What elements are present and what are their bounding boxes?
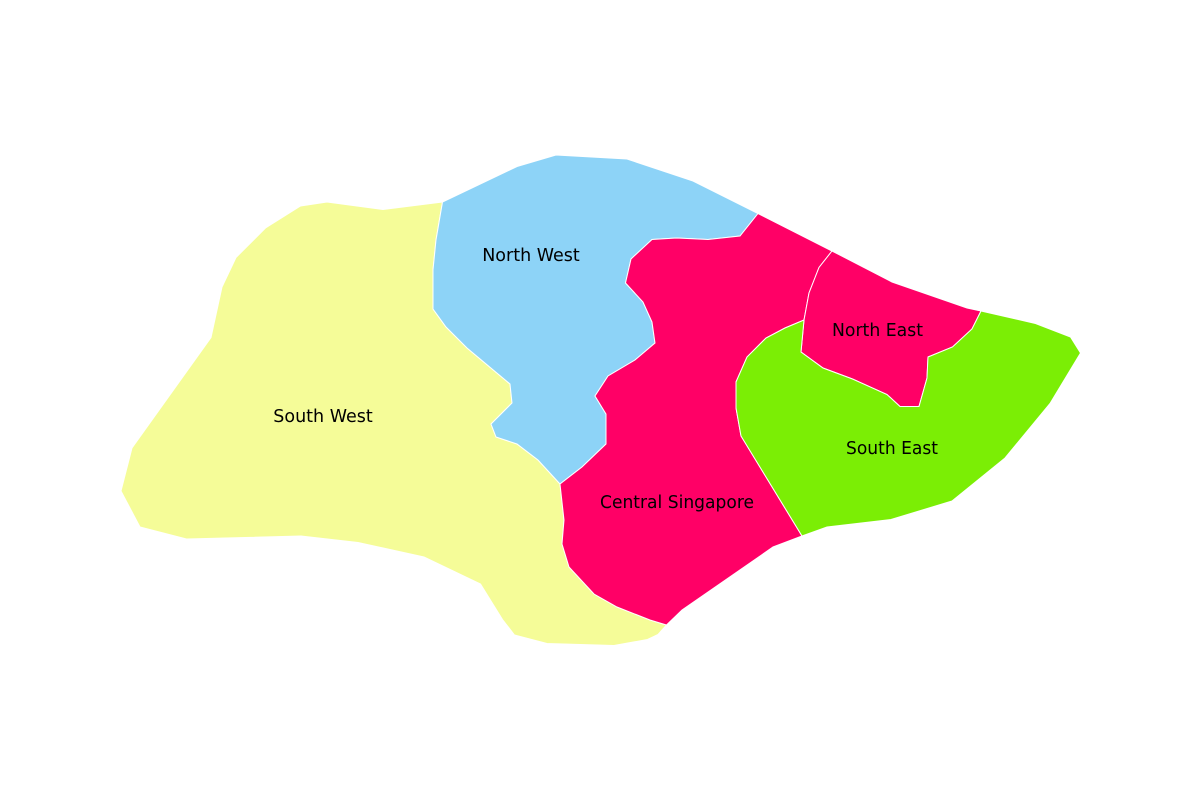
region: North West xyxy=(433,155,758,484)
label: Central Singapore: Central Singapore xyxy=(600,493,754,513)
label: North West: North West xyxy=(482,246,580,266)
region: Central Singapore xyxy=(560,214,832,625)
label: South East: South East xyxy=(846,439,938,459)
region: South West xyxy=(121,202,666,646)
region: North East xyxy=(801,251,981,406)
region: South East xyxy=(736,311,1080,536)
label: North East: North East xyxy=(832,321,923,341)
label: South West: South West xyxy=(273,407,373,427)
